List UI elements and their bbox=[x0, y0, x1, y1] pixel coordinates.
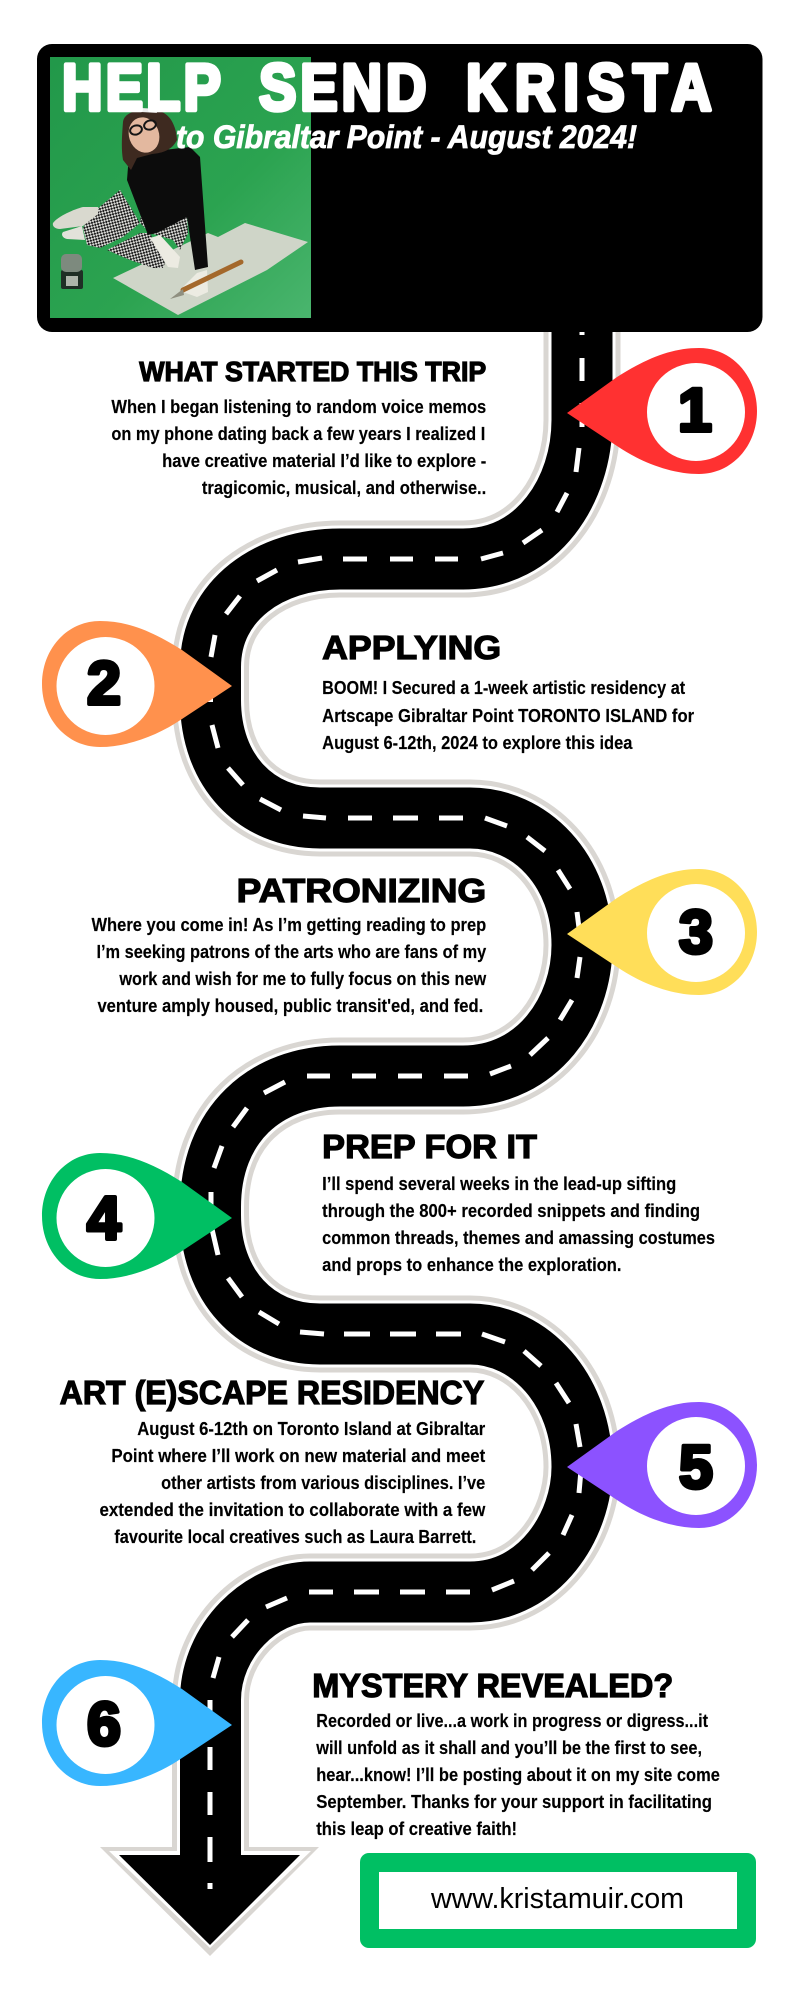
title: KRISTA bbox=[466, 51, 712, 124]
body text: extended the invitation to collaborate with a few bbox=[99, 1499, 486, 1520]
heading: WHAT STARTED THIS TRIP bbox=[139, 356, 486, 387]
pin 2: orange: 2 bbox=[87, 649, 121, 717]
body text: I’m seeking patrons of the arts who are fans of my bbox=[96, 941, 487, 962]
pin 3: yellow bbox=[567, 869, 757, 995]
body text bbox=[91, 914, 487, 1016]
body text: hear...know! I’ll be posting about it on my site come bbox=[316, 1764, 720, 1785]
body text: Recorded or live...a work in progress or digress...it bbox=[316, 1710, 708, 1731]
pin 4: green bbox=[42, 1153, 232, 1279]
pin 1: red: 1 bbox=[678, 376, 712, 444]
website callout bbox=[360, 1853, 756, 1948]
body text: other artists from various disciplines. I’ve bbox=[161, 1472, 485, 1493]
title: SEND bbox=[259, 51, 426, 124]
pin 6: blue: 6 bbox=[87, 1690, 121, 1758]
header panel bbox=[37, 44, 762, 332]
section 1: what started this trip bbox=[111, 356, 486, 498]
body text: August 6-12th, 2024 to explore this idea bbox=[322, 732, 633, 753]
body text: common threads, themes and amassing costumes bbox=[322, 1227, 715, 1248]
body text bbox=[99, 1418, 486, 1547]
body text bbox=[315, 1710, 720, 1839]
body text bbox=[322, 677, 694, 753]
heading: MYSTERY REVEALED? bbox=[312, 1667, 673, 1704]
title bbox=[62, 51, 712, 124]
body text: work and wish for me to fully focus on this new bbox=[118, 968, 487, 989]
pin 3: yellow: 3 bbox=[679, 898, 713, 966]
body text: on my phone dating back a few years I realized I bbox=[111, 423, 485, 444]
body text: will unfold as it shall and you’ll be the first to see, bbox=[315, 1737, 702, 1758]
body text: through the 800+ recorded snippets and finding bbox=[322, 1200, 700, 1221]
section 6: mystery revealed bbox=[312, 1667, 720, 1839]
pin 6: blue bbox=[42, 1660, 232, 1786]
section 4: prep for it bbox=[322, 1128, 715, 1275]
body text: August 6-12th on Toronto Island at Gibraltar bbox=[137, 1418, 485, 1439]
body text: this leap of creative faith! bbox=[316, 1818, 517, 1839]
heading: APPLYING bbox=[322, 629, 501, 666]
body text: BOOM! I Secured a 1-week artistic residency at bbox=[322, 677, 685, 698]
subtitle: to Gibraltar Point - August 2024! bbox=[176, 119, 637, 155]
body text: have creative material I’d like to explore - bbox=[162, 450, 486, 471]
heading: PATRONIZING bbox=[237, 872, 486, 909]
title: HELP bbox=[62, 51, 221, 124]
pin 2: orange bbox=[42, 621, 232, 747]
heading: PREP FOR IT bbox=[322, 1128, 537, 1165]
heading: ART (E)SCAPE RESIDENCY bbox=[60, 1374, 484, 1411]
pin 5: purple bbox=[567, 1402, 757, 1528]
photo: Krista on green backdrop bbox=[50, 57, 311, 318]
section 2: applying bbox=[322, 629, 694, 753]
body text: I’ll spend several weeks in the lead-up sifting bbox=[322, 1173, 676, 1194]
body text: and props to enhance the exploration. bbox=[322, 1254, 622, 1275]
pin 1: red bbox=[567, 348, 757, 474]
body text: September. Thanks for your support in facilitating bbox=[316, 1791, 712, 1812]
body text: Where you come in! As I’m getting reading to prep bbox=[91, 914, 486, 935]
website callout: www.kristamuir.com bbox=[430, 1883, 684, 1915]
body text: venture amply housed, public transit'ed, and fed. bbox=[97, 995, 483, 1016]
section 5: art (e)scape residency bbox=[60, 1374, 486, 1547]
body text: Artscape Gibraltar Point TORONTO ISLAND for bbox=[322, 705, 694, 726]
body text: favourite local creatives such as Laura Barrett. bbox=[114, 1526, 476, 1547]
winding road with arrow bbox=[100, 320, 582, 1956]
pin 4: green: 4 bbox=[87, 1184, 121, 1252]
body text bbox=[322, 1173, 715, 1275]
body text: tragicomic, musical, and otherwise.. bbox=[202, 477, 486, 498]
section 3: patronizing bbox=[91, 872, 487, 1016]
body text: Point where I’ll work on new material and meet bbox=[111, 1445, 485, 1466]
pin 5: purple: 5 bbox=[679, 1433, 713, 1501]
body text: When I began listening to random voice memos bbox=[111, 396, 486, 417]
body text bbox=[111, 396, 486, 498]
